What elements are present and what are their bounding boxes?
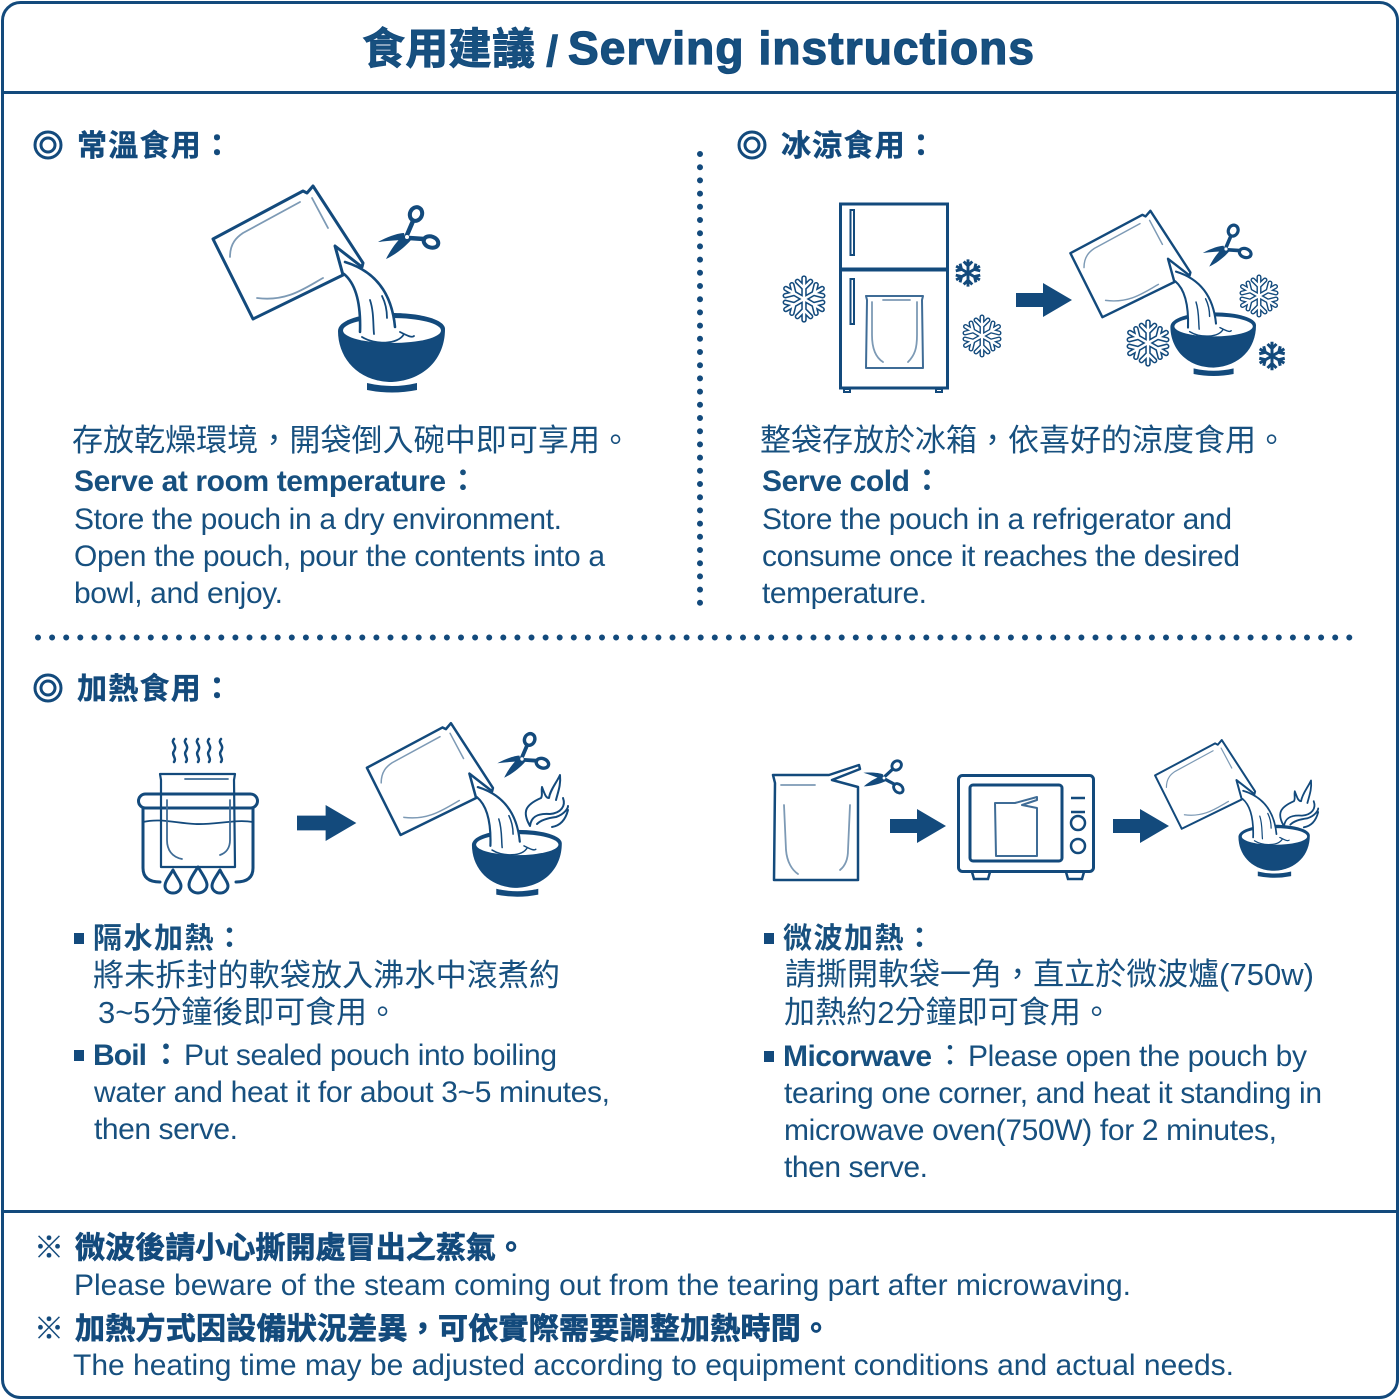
icon: pouch pouring into steaming bowl, microwave bbox=[1155, 740, 1318, 878]
note: heating time: The heating time may be adjusted according to equipment conditions and actual needs. bbox=[73, 1349, 1234, 1382]
text: boil instructions: Put sealed pouch into boiling bbox=[184, 1039, 557, 1072]
icon: refrigerator with pouch bbox=[840, 204, 948, 392]
text: room temperature instructions: Open the pouch, pour the contents into a bbox=[74, 540, 605, 573]
arrow bbox=[1113, 809, 1169, 843]
note: steam warning: ※ bbox=[34, 1232, 64, 1265]
note: steam warning: 微波後請小心撕開處冒出之蒸氣。 bbox=[75, 1232, 526, 1265]
text: boil instructions: water and heat it for about 3~5 minutes, bbox=[93, 1076, 610, 1109]
note: heating time: ※ bbox=[34, 1313, 64, 1346]
panel: cold bbox=[739, 130, 1287, 610]
icon: pouch pouring into bowl with scissors bbox=[213, 186, 445, 392]
panel: heated bbox=[35, 673, 1322, 1184]
title: 食用建議 bbox=[362, 26, 535, 74]
note: heating time: 加熱方式因設備狀況差異，可依實際需要調整加熱時間。 bbox=[75, 1313, 831, 1346]
note: heating time bbox=[34, 1313, 1234, 1382]
text: cold instructions: 整袋存放於冰箱，依喜好的涼度食用。 bbox=[760, 423, 1287, 458]
icon: pouch pouring into bowl with snowflakes bbox=[1070, 211, 1285, 376]
text: microwave instructions bbox=[764, 922, 1322, 1184]
text: microwave instructions: Micorwave bbox=[783, 1040, 932, 1073]
text: room temperature instructions: Store the pouch in a dry environment. bbox=[74, 503, 562, 536]
text: boil instructions: Boil bbox=[93, 1039, 147, 1072]
text: microwave instructions: tearing one corner, and heat it standing in bbox=[784, 1077, 1322, 1110]
text: cold instructions: ： bbox=[912, 465, 942, 498]
icon: microwave oven with pouch bbox=[958, 776, 1094, 879]
text: cold instructions: consume once it reaches the desired bbox=[762, 540, 1240, 573]
text: microwave instructions: 請撕開軟袋一角，直立於微波爐(750w) bbox=[785, 957, 1314, 992]
heading: cold: 冰涼食用： bbox=[781, 130, 936, 163]
text: cold instructions: Store the pouch in a refrigerator and bbox=[762, 503, 1232, 536]
text: boil instructions bbox=[74, 922, 610, 1146]
text: microwave instructions: 加熱約2分鐘即可食用。 bbox=[784, 995, 1112, 1030]
text: boil instructions: 3~5分鐘後即可食用。 bbox=[98, 995, 398, 1030]
text: room temperature instructions: ： bbox=[448, 465, 478, 498]
text: boil instructions: 隔水加熱： bbox=[93, 922, 244, 955]
note: steam warning: Please beware of the steam coming out from the tearing part after microwaving. bbox=[74, 1269, 1131, 1302]
arrow bbox=[297, 805, 356, 841]
text: microwave instructions: Please open the pouch by bbox=[968, 1040, 1307, 1073]
icon: torn pouch with scissors bbox=[773, 749, 915, 880]
text: cold instructions: temperature. bbox=[762, 577, 927, 610]
arrow bbox=[1016, 283, 1072, 317]
arrow bbox=[890, 809, 946, 843]
panel: room temperature bbox=[35, 130, 631, 610]
text: room temperature instructions: 存放乾燥環境，開袋倒入碗中即可享用。 bbox=[72, 423, 631, 458]
icon: pouch pouring into steaming bowl bbox=[367, 723, 568, 897]
text: boil instructions: then serve. bbox=[94, 1113, 238, 1146]
text: microwave instructions: microwave oven(750W) for 2 minutes, bbox=[784, 1114, 1277, 1147]
title: / bbox=[546, 27, 558, 76]
text: room temperature instructions: bowl, and enjoy. bbox=[74, 577, 283, 610]
title: Serving instructions bbox=[568, 22, 1034, 74]
heading: room temperature: 常溫食用： bbox=[77, 130, 232, 163]
text: microwave instructions: then serve. bbox=[784, 1151, 928, 1184]
note: steam warning bbox=[34, 1232, 1131, 1302]
text: microwave instructions: 微波加熱： bbox=[783, 922, 934, 955]
text: room temperature instructions bbox=[72, 423, 631, 610]
title bbox=[362, 22, 1034, 76]
text: boil instructions: ： bbox=[151, 1039, 181, 1072]
icon: snowflakes beside refrigerator bbox=[785, 259, 999, 355]
text: room temperature instructions: Serve at room temperature bbox=[74, 465, 446, 498]
heading: heated: 加熱食用： bbox=[77, 673, 232, 706]
text: cold instructions: Serve cold bbox=[762, 465, 910, 498]
icon: pouch in boiling pot bbox=[138, 739, 258, 893]
text: boil instructions: 將未拆封的軟袋放入沸水中滾煮約 bbox=[93, 958, 560, 993]
text: cold instructions bbox=[760, 423, 1287, 610]
footer notes bbox=[34, 1232, 1234, 1382]
text: microwave instructions: ： bbox=[935, 1040, 965, 1073]
